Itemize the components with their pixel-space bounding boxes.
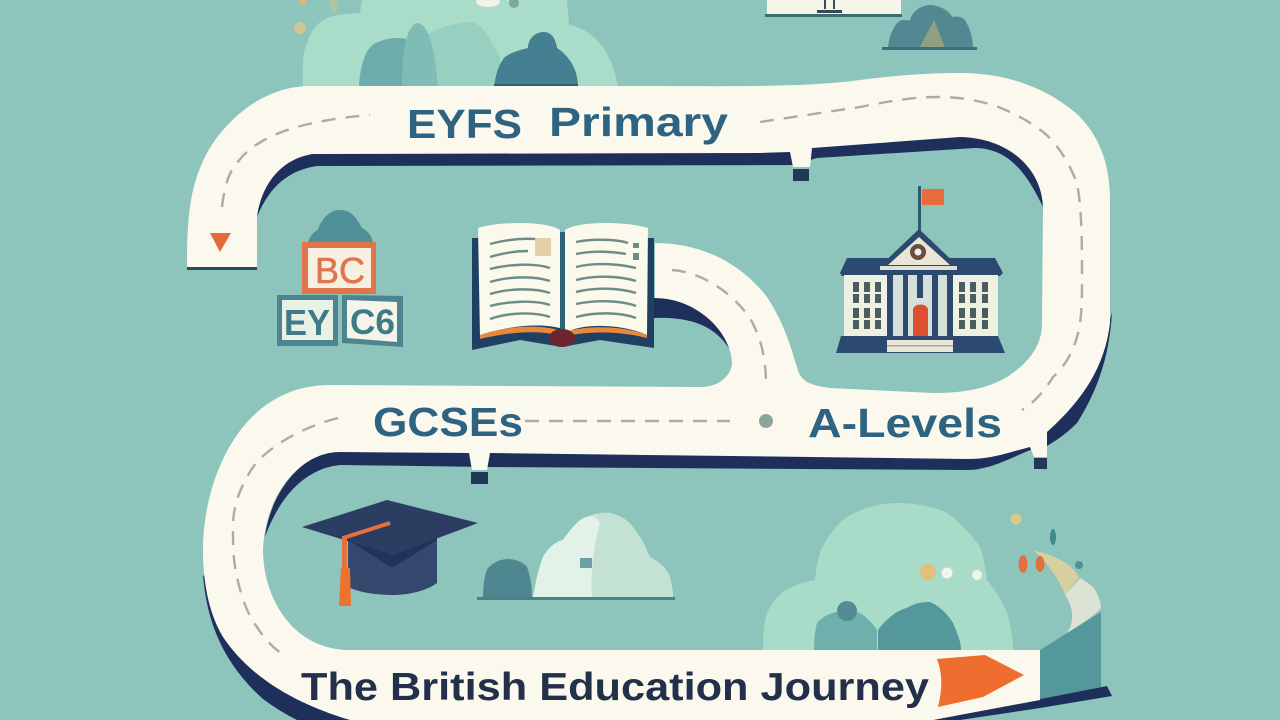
- label: Primary: Primary: [549, 99, 728, 145]
- label: A-Levels: A-Levels: [808, 400, 1002, 446]
- shadow on lower left outer bend: [203, 575, 360, 720]
- icon: school building: [836, 186, 1005, 353]
- road tab feet: [471, 169, 1047, 484]
- shadow under middle road section: [265, 445, 1033, 537]
- shadow under start of road: [187, 266, 257, 270]
- shadow under bottom road end: [933, 686, 1112, 720]
- road junction dot: [759, 414, 773, 428]
- road: navy shadow edges: [187, 136, 1112, 720]
- icon: open book: [472, 223, 654, 350]
- title: The British Education Journey: [301, 666, 929, 709]
- icon: alphabet blocks: BC: [315, 250, 365, 291]
- start arrow on road: [210, 233, 231, 252]
- bottom right hill scenery: [763, 503, 1013, 650]
- decorative dots: [920, 514, 1083, 580]
- icon: alphabet blocks: C6: [350, 303, 395, 342]
- shadow under book connector: [654, 298, 732, 353]
- bottom right road ribbon end: [1033, 550, 1101, 699]
- icon: alphabet blocks: [277, 210, 403, 347]
- label: GCSEs: GCSEs: [373, 399, 523, 445]
- icon: orange end arrow: [937, 655, 1024, 707]
- road dashed centre lines: [222, 97, 1082, 657]
- top left hill scenery: [294, 0, 618, 87]
- label: EYFS: EYFS: [407, 101, 522, 147]
- shadow under top road section: [257, 136, 1043, 217]
- road: cream winding path: [187, 73, 1110, 720]
- bottom centre hill scenery: [477, 513, 675, 600]
- icon: graduation cap: [302, 500, 478, 606]
- top right open book edge and hill: [765, 0, 977, 50]
- icon: alphabet blocks: EY: [284, 302, 330, 343]
- shadow on right outer bend: [1047, 312, 1112, 446]
